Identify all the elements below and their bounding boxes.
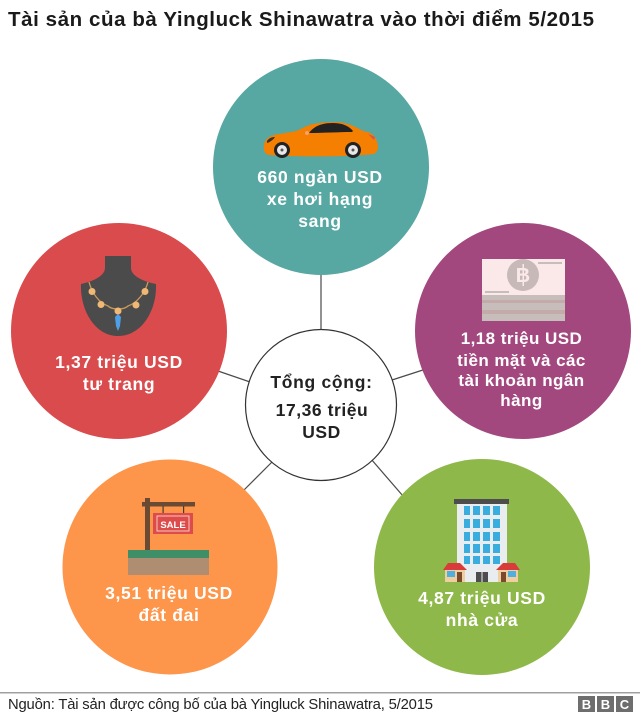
panel: luxury cars	[213, 59, 429, 275]
label: jewellery: tư trang	[83, 374, 155, 394]
title: Tài sản của bà Yingluck Shinawatra vào thời điểm 5/2015	[8, 8, 594, 31]
label: houses	[418, 588, 546, 630]
label: jewellery: 1,37 triệu USD	[55, 352, 183, 372]
label: luxury cars: sang	[298, 211, 342, 231]
icon: banknotes	[482, 259, 565, 321]
panel: jewellery	[11, 223, 227, 439]
label: land: đất đai	[139, 605, 199, 625]
label: total: Tổng cộng:	[270, 372, 373, 392]
label: houses: 4,87 triệu USD	[418, 588, 546, 608]
panel: houses	[374, 459, 590, 675]
source text: Nguồn: Tài sản được công bố của bà Yingluck Shinawatra, 5/2015	[8, 697, 433, 713]
label: luxury cars	[257, 167, 383, 231]
label: cash and bank accounts: tiền mặt và các	[457, 351, 586, 370]
icon: for sale sign	[128, 498, 209, 575]
icon: for sale sign: SALE	[160, 520, 186, 531]
BBC logo	[578, 696, 633, 712]
BBC logo: B	[601, 697, 610, 712]
BBC logo: C	[620, 697, 630, 712]
icon: orange car	[264, 122, 378, 158]
icon: banknotes: B	[516, 265, 530, 287]
label: total: USD	[302, 422, 341, 442]
BBC logo: B	[582, 697, 591, 712]
label: total	[270, 372, 373, 442]
label: luxury cars: xe hơi hạng	[267, 189, 373, 209]
label: land: 3,51 triệu USD	[105, 583, 233, 603]
icon: necklace	[81, 256, 156, 336]
label: luxury cars: 660 ngàn USD	[257, 167, 383, 187]
icon: tower and houses	[443, 499, 520, 582]
footer rule	[0, 692, 640, 694]
label: jewellery	[55, 352, 183, 394]
label: cash and bank accounts: hàng	[500, 391, 543, 410]
panel: cash and bank accounts	[415, 223, 631, 439]
label: total: 17,36 triệu	[276, 400, 368, 420]
label: cash and bank accounts: 1,18 triệu USD	[461, 329, 582, 348]
label: houses: nhà cửa	[446, 610, 518, 630]
panel: land	[62, 460, 278, 674]
panel: total	[246, 330, 396, 480]
label: cash and bank accounts	[457, 329, 586, 410]
label: land	[105, 583, 233, 625]
connector lines	[218, 272, 426, 496]
label: cash and bank accounts: tài khoản ngân	[458, 371, 585, 390]
